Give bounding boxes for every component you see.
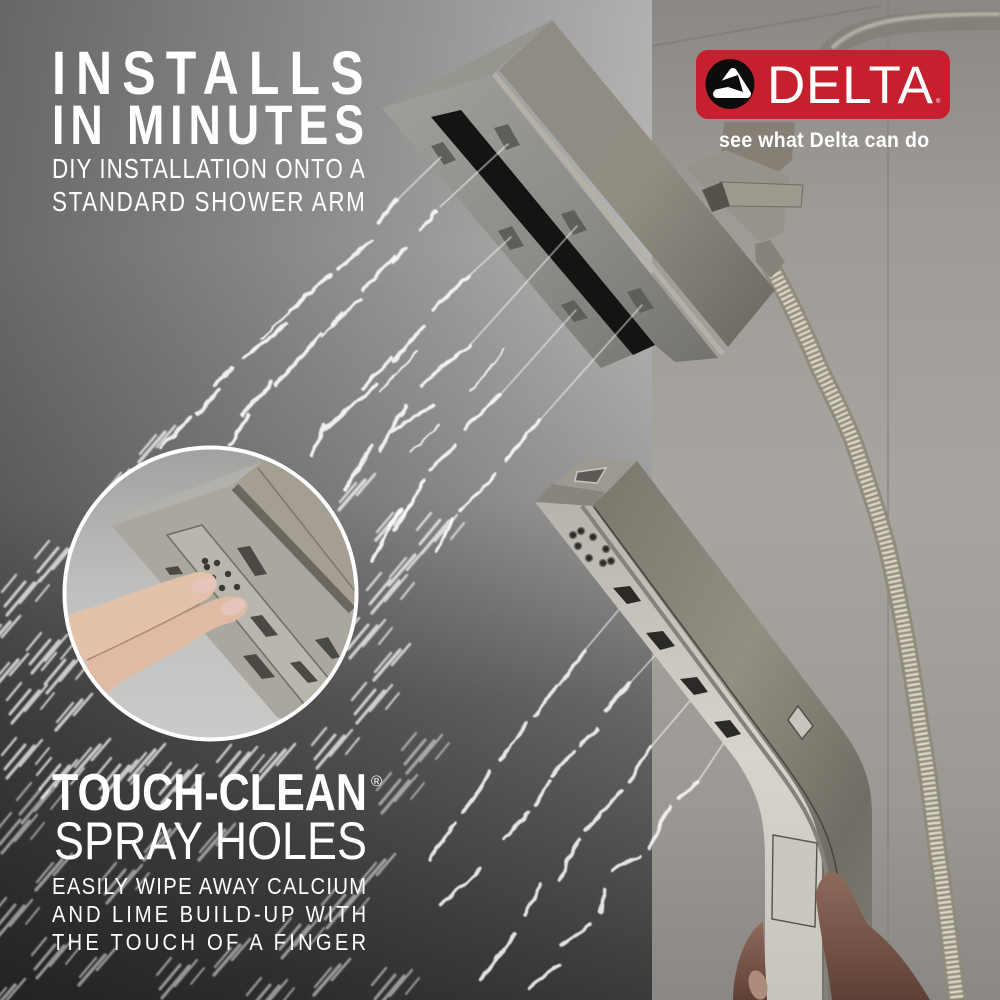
- head top face: [382, 20, 552, 108]
- subheading: DIY installation: STANDARD SHOWER ARM: [52, 187, 365, 218]
- body text: touch-clean description: [52, 873, 366, 955]
- head side face: [499, 20, 775, 347]
- hand shower spray face: [535, 502, 822, 1000]
- head front plate: [382, 75, 718, 368]
- lower finger: [87, 596, 248, 700]
- thumb: [733, 922, 767, 1000]
- background: right tile wall: [652, 0, 1000, 1000]
- heading: touch-clean spray holes: TOUCH-CLEAN: [52, 764, 367, 822]
- inset spray holes: [202, 558, 240, 591]
- shower head: [382, 20, 775, 368]
- inset head front plate: [112, 485, 370, 722]
- tagline: see what Delta can do: [719, 129, 929, 152]
- background: left wall: [0, 0, 653, 1000]
- upper finger: [68, 572, 217, 660]
- subheading: DIY installation: DIY INSTALLATION ONTO A: [52, 154, 365, 185]
- inset side face: [233, 462, 354, 613]
- hand shower: [535, 457, 872, 1000]
- inset center panel: [167, 525, 330, 720]
- delta emblem: [706, 59, 754, 109]
- spray holes: [569, 527, 615, 567]
- water: faint lower spray: [0, 733, 449, 1000]
- fingers: [816, 872, 930, 1000]
- hand shower end cap: [552, 457, 637, 494]
- Delta logo badge: ®: [936, 98, 941, 105]
- fingernails: [192, 577, 216, 593]
- jagged jets: [160, 200, 540, 560]
- inset head top face: [207, 462, 261, 484]
- hand shower button: [772, 835, 817, 927]
- hand holding shower: [733, 872, 930, 1000]
- heading: touch-clean spray holes: SPRAY HOLES: [54, 812, 367, 871]
- hand shower trim line: [594, 507, 838, 1000]
- head dark slot: [431, 110, 655, 355]
- heading: touch-clean spray holes: [52, 764, 382, 871]
- hand shower square hole: [788, 706, 813, 739]
- wordmark: DELTA: [767, 56, 934, 115]
- inset slots: [165, 546, 340, 683]
- head nozzles: [431, 124, 654, 322]
- Delta logo badge: [696, 50, 950, 119]
- shower arm: [822, 14, 1000, 60]
- body text: touch-clean description: EASILY WIPE AWAY CALCIUM: [52, 873, 366, 899]
- heading: installs in minutes: IN MINUTES: [52, 93, 364, 156]
- heading: installs in minutes: INSTALLS: [52, 39, 364, 107]
- water streams from hand shower: [430, 606, 727, 988]
- flexible hose: [770, 265, 957, 1000]
- inset detail circle: [60, 440, 370, 750]
- hand shower side face: [592, 461, 872, 1000]
- thin hand jets: [585, 606, 727, 783]
- body text: touch-clean description: THE TOUCH OF A FINGER: [52, 929, 366, 955]
- thin jets at nozzles: [397, 144, 642, 420]
- water streams from shower head: [160, 144, 642, 560]
- water: blurred spray clusters: [0, 426, 464, 803]
- subheading: DIY installation: [52, 154, 365, 218]
- heading: touch-clean spray holes: ®: [371, 773, 382, 790]
- jagged hand jets: [430, 650, 697, 988]
- hand shower nozzles: [613, 586, 741, 738]
- body text: touch-clean description: AND LIME BUILD-UP WITH: [52, 901, 366, 927]
- heading: installs in minutes: [52, 39, 364, 156]
- shower head bracket: [684, 122, 803, 278]
